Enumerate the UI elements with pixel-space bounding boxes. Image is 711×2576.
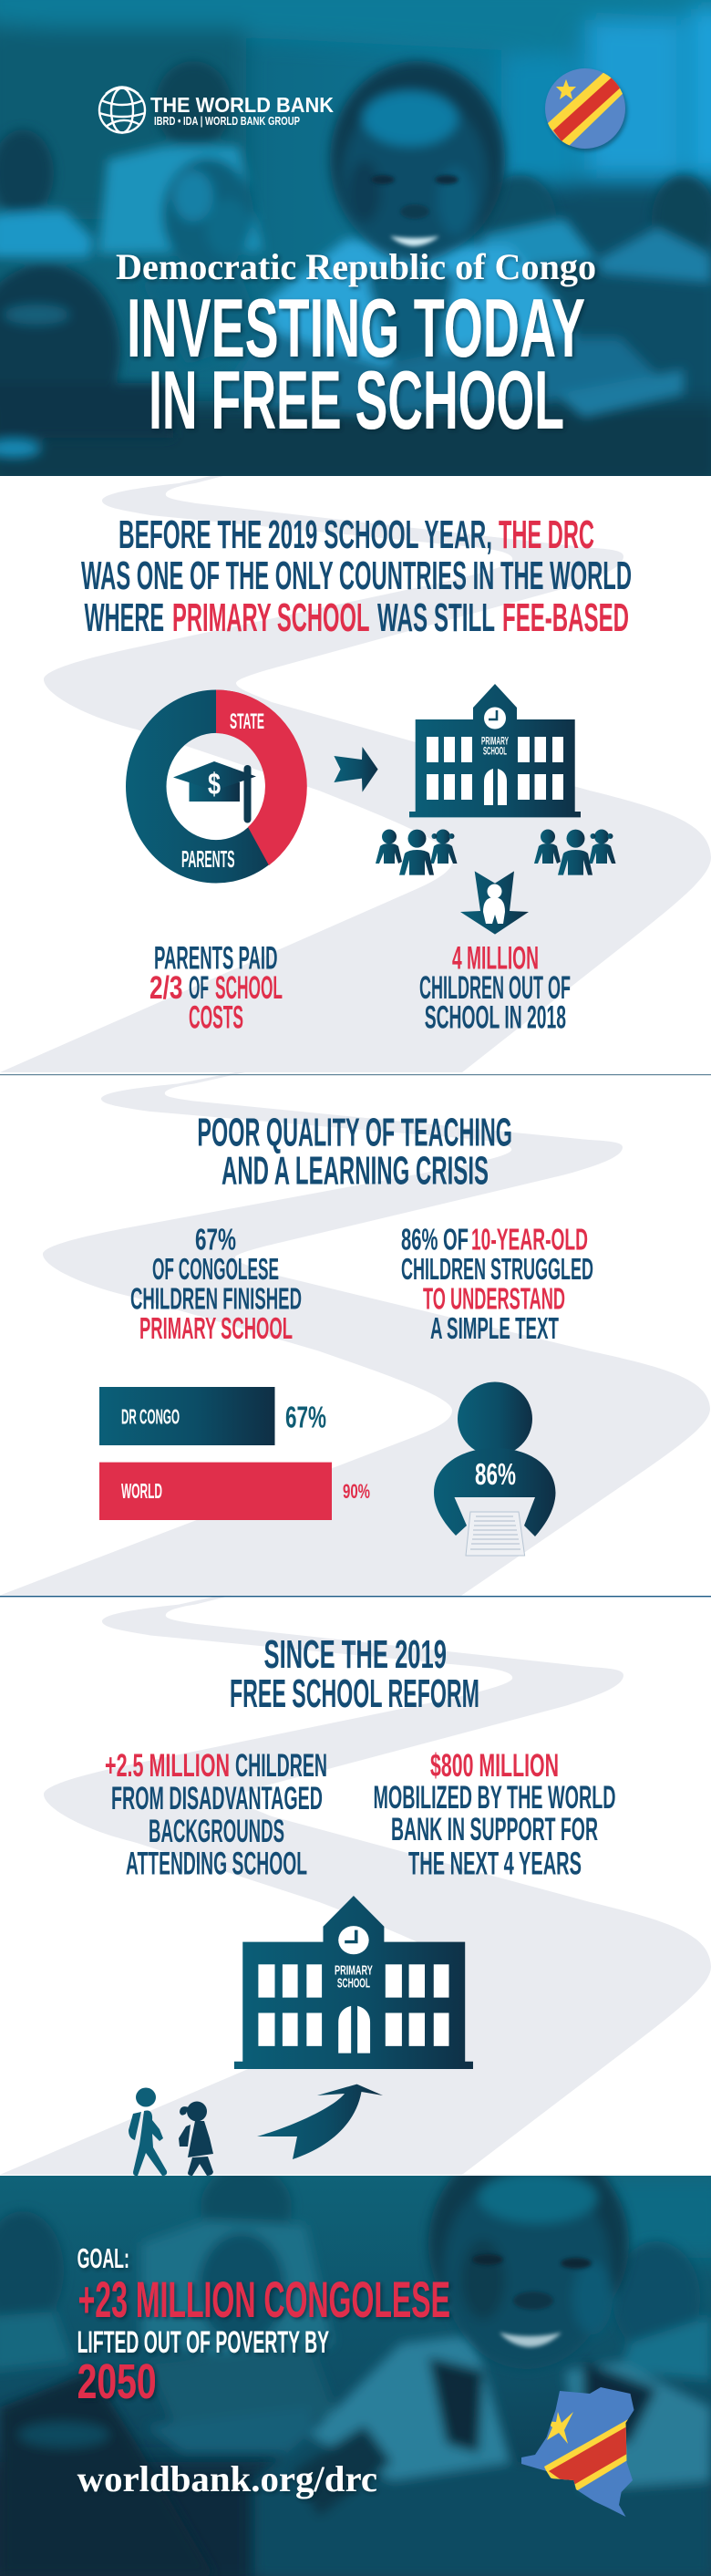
heading: PRIMARY SCHOOL — [172, 595, 370, 640]
goal figure: +23 MILLION CONGOLESE — [78, 2271, 450, 2328]
text: 4 million children: SCHOOL IN 2018 — [425, 999, 566, 1036]
text: 800 million mobilized: $800 MILLION — [430, 1748, 559, 1784]
text: parents paid: 2/3 — [149, 970, 182, 1006]
heading: FREE SCHOOL REFORM — [230, 1671, 479, 1716]
heading — [197, 1111, 512, 1193]
icon: globe — [99, 88, 145, 133]
subtitle: country: Democratic Republic of Congo — [116, 246, 596, 287]
panel: before 2019 school fees: SCHOOL — [215, 970, 283, 1006]
icon: reader with 86 percent — [434, 1382, 556, 1556]
heading — [230, 1632, 479, 1716]
road: section 3 — [0, 1591, 711, 2175]
icon: primary school large: PRIMARY — [335, 1963, 373, 1978]
text: parents paid: OF — [189, 970, 209, 1006]
icon: DRC flag circle — [545, 68, 628, 151]
text: 2.5 million children: FROM DISADVANTAGED — [111, 1781, 323, 1816]
panel: before 2019 school fees — [81, 512, 632, 1036]
text: 4 million children: 4 MILLION — [452, 941, 539, 976]
bar: DR Congo: 67% — [285, 1401, 326, 1433]
World Bank logo — [99, 88, 334, 133]
icon: boy with backpack — [129, 2088, 167, 2176]
panel: since the reform — [105, 1632, 616, 2176]
text: parents paid — [149, 941, 283, 1036]
goal label: GOAL: — [77, 2242, 129, 2274]
text: 67 percent finished: CHILDREN FINISHED — [130, 1282, 302, 1316]
icon: group of children left — [376, 830, 458, 875]
bar: World: 90% — [343, 1480, 370, 1503]
title — [127, 283, 585, 447]
footer photo: girl close-up — [0, 2141, 711, 2576]
icon: children walking to school — [129, 2088, 213, 2176]
icon: primary school: PRIMARY — [481, 737, 509, 748]
goal description: LIFTED OUT OF POVERTY BY — [77, 2325, 329, 2360]
icon: girl with backpack — [179, 2101, 213, 2176]
arrow: to school — [334, 747, 378, 792]
bar: World: WORLD — [121, 1479, 162, 1503]
heading — [81, 512, 632, 640]
icon: primary school: SCHOOL — [483, 746, 507, 757]
website link: worldbank.org/drc — [77, 2458, 377, 2499]
header photo: classroom with smiling girl — [0, 0, 711, 492]
text: parents paid: COSTS — [189, 999, 243, 1036]
text: 2.5 million children: BACKGROUNDS — [149, 1814, 284, 1849]
logo wordmark: THE WORLD BANK — [150, 93, 334, 117]
bar chart: completion rate — [99, 1387, 370, 1520]
text: parents paid: PARENTS PAID — [154, 941, 277, 976]
heading: THE DRC — [499, 512, 594, 557]
road: section 1 — [0, 470, 711, 1072]
donut chart: parents and state shares — [126, 689, 307, 883]
text: 4 million children: CHILDREN OUT OF — [419, 970, 571, 1006]
goal year: 2050 — [77, 2354, 157, 2409]
text: 67 percent finished: 67% — [195, 1222, 236, 1257]
text: 86 percent struggled: TO UNDERSTAND — [423, 1282, 565, 1316]
text: 86 percent struggled: 10-YEAR-OLD — [471, 1222, 588, 1257]
text: 800 million mobilized — [374, 1748, 616, 1882]
icon: paper — [466, 1512, 525, 1556]
icon: graduation cap with dollar sign: $ — [208, 767, 221, 801]
text: 86 percent struggled — [401, 1222, 593, 1345]
arrow: curved up to school — [257, 2085, 383, 2159]
heading: SINCE THE 2019 — [264, 1632, 447, 1677]
text: 2.5 million children: +2.5 MILLION — [105, 1748, 230, 1784]
panel: learning crisis — [99, 1111, 593, 1556]
text: 2.5 million children: ATTENDING SCHOOL — [126, 1846, 307, 1882]
icon: down arrow with out-of-school child — [460, 871, 529, 935]
text: 86 percent struggled: A SIMPLE TEXT — [430, 1311, 559, 1345]
text: 2.5 million children — [105, 1748, 327, 1882]
icon: map of DRC in flag colours — [521, 2387, 638, 2517]
state label: STATE — [230, 709, 264, 734]
text: 67 percent finished: PRIMARY SCHOOL — [139, 1311, 293, 1345]
text: 67 percent finished — [130, 1222, 302, 1345]
text: 4 million children — [419, 941, 571, 1036]
donut chart: parents and state shares: PARENTS — [181, 845, 235, 873]
heading: AND A LEARNING CRISIS — [222, 1148, 489, 1193]
icon: primary school large — [234, 1896, 473, 2069]
panel: footer goal — [0, 2141, 711, 2576]
panel: header — [0, 0, 711, 492]
text: 2.5 million children: CHILDREN — [235, 1748, 327, 1784]
bar: DR Congo — [99, 1387, 326, 1445]
text: 86 percent struggled: 86% OF — [401, 1222, 469, 1257]
text: 800 million mobilized: THE NEXT 4 YEARS — [408, 1846, 582, 1882]
bar: DR Congo: DR CONGO — [121, 1404, 180, 1428]
icon: graduation cap with dollar sign — [173, 761, 256, 822]
icon: group of children right — [534, 830, 616, 875]
bar: World — [99, 1463, 370, 1520]
icon: primary school large: SCHOOL — [337, 1976, 370, 1991]
road: section 2 — [0, 1071, 710, 1596]
text: 67 percent finished: OF CONGOLESE — [152, 1252, 279, 1286]
heading: WHERE — [84, 595, 164, 640]
heading: WAS STILL — [377, 595, 495, 640]
icon: primary school — [409, 684, 581, 817]
logo subline: IBRD • IDA | WORLD BANK GROUP — [154, 114, 300, 128]
icon: reader with 86 percent: 86% — [475, 1457, 516, 1491]
